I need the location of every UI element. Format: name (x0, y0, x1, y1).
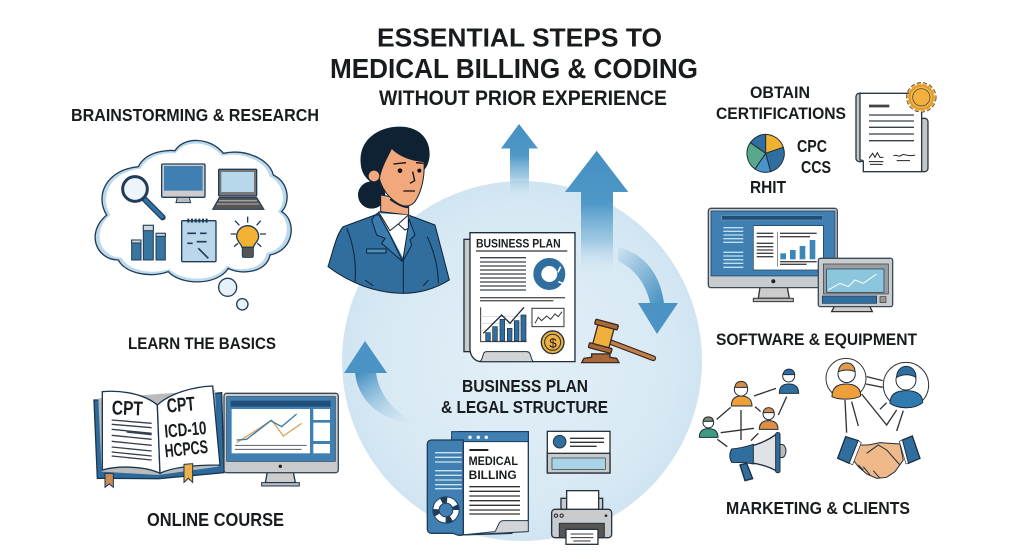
heading: marketing and clients: MARKETING & CLIENTS (726, 498, 910, 518)
heading: software and equipment: SOFTWARE & EQUIPMENT (716, 331, 917, 349)
icon: open code book: ICD-10 (164, 417, 207, 442)
heading: online course: ONLINE COURSE (147, 510, 284, 530)
icon: businesswoman (328, 127, 449, 293)
icon: printer (552, 491, 612, 544)
icon: people network and megaphone (699, 369, 799, 481)
text: certification names (750, 136, 831, 197)
icon: gavel (582, 319, 653, 363)
heading: obtain certifications: OBTAIN (750, 83, 810, 102)
icon: open code book: CPT (111, 397, 143, 420)
heading: obtain certifications: CERTIFICATIONS (716, 104, 846, 123)
text: certification names: CPC (797, 136, 827, 156)
icon: medical billing document (427, 432, 528, 535)
arrow: curved up left (344, 341, 418, 424)
icon: open code book: HCPCS (164, 436, 209, 461)
chart: certification pie (747, 134, 784, 172)
heading: obtain certifications (716, 83, 846, 123)
icon: small monitor (818, 258, 893, 312)
text: certification names: CCS (801, 157, 831, 177)
arrow: curved down right (618, 247, 678, 334)
icon: certificate with seal (856, 84, 934, 172)
heading: business plan and legal structure: BUSINESS PLAN (462, 376, 588, 396)
title: MEDICAL BILLING & CODING (330, 53, 698, 84)
icon: online course monitor (224, 393, 338, 486)
heading: business plan and legal structure (441, 376, 608, 417)
text: certification names: RHIT (750, 177, 786, 197)
icon: business plan document (464, 233, 575, 362)
icon: medical billing document: BILLING (469, 468, 517, 482)
icon: open code book: CPT (166, 393, 196, 418)
icon: large desktop monitor (708, 208, 837, 302)
icon: medical billing document: MEDICAL (469, 454, 518, 468)
title: WITHOUT PRIOR EXPERIENCE (379, 87, 667, 110)
title: ESSENTIAL STEPS TO (377, 22, 662, 52)
icon: thought cloud with research icons (95, 140, 291, 310)
icon: business plan document: $ (549, 335, 557, 350)
icon: open code book (94, 386, 224, 487)
heading: brainstorming and research: BRAINSTORMING & RESEARCH (71, 105, 319, 125)
arrow: small up (501, 124, 538, 198)
arrow: large up (565, 151, 628, 275)
heading: business plan and legal structure: & LEGAL STRUCTURE (441, 397, 608, 417)
title (330, 22, 698, 110)
background circle (342, 181, 702, 541)
icon: clients and handshake (826, 358, 929, 478)
heading: learn the basics: LEARN THE BASICS (128, 334, 276, 353)
icon: business plan document: BUSINESS PLAN (476, 236, 561, 250)
icon: id card (547, 431, 610, 473)
